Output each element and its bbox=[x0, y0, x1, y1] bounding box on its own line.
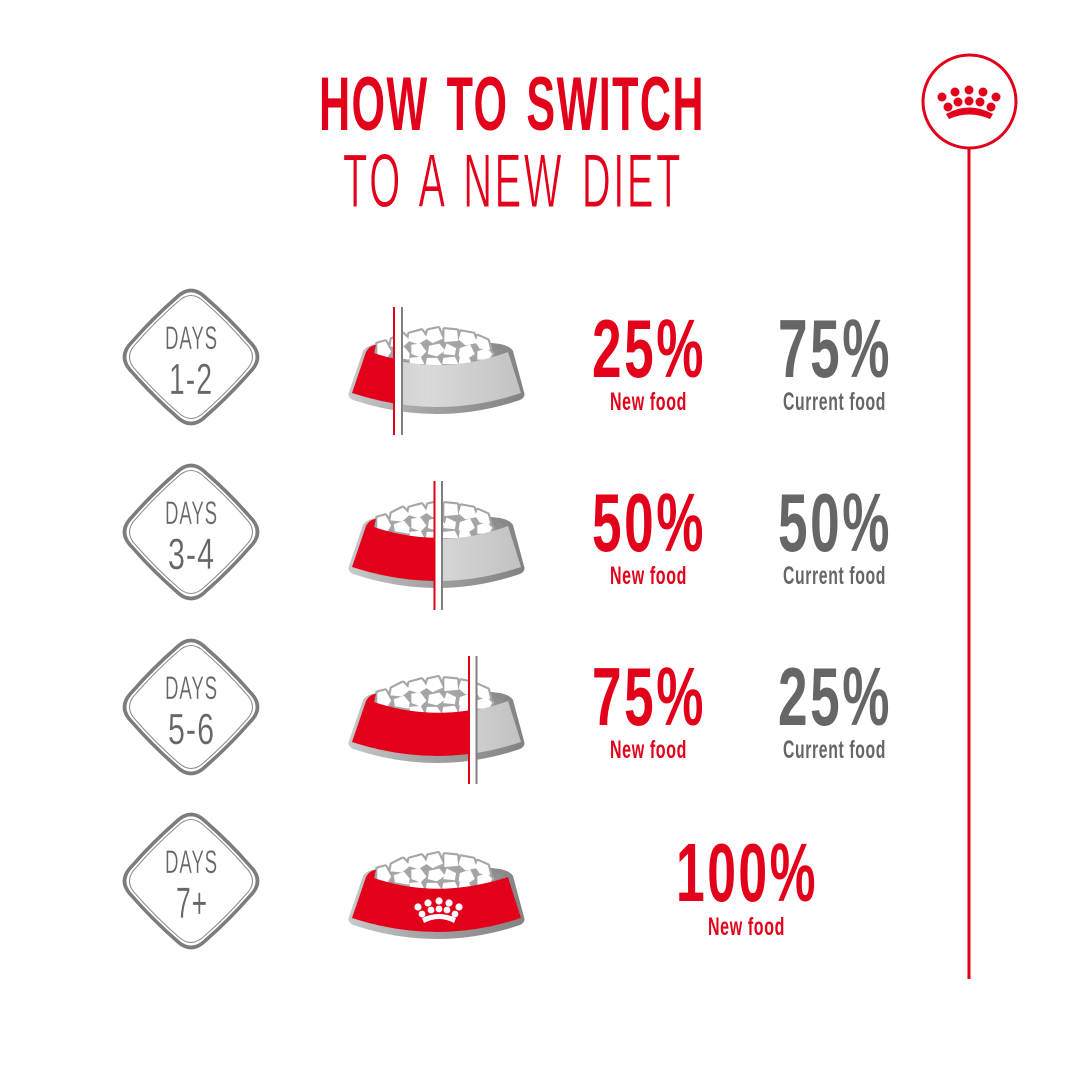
badge: days 3-4: DAYS bbox=[165, 495, 218, 531]
icon: white crown bbox=[414, 897, 463, 923]
stat: 100 percent new food: New food bbox=[708, 913, 785, 941]
stat: 75 percent new food: 75% bbox=[592, 650, 706, 743]
row: days 3-4 bbox=[124, 466, 892, 610]
badge: days 5-6 bbox=[124, 640, 258, 774]
row: days 5-6 bbox=[124, 640, 892, 784]
logo circle with timeline bbox=[923, 55, 1016, 979]
badge: days 7+: DAYS bbox=[165, 844, 218, 880]
icon: crown bbox=[938, 86, 1000, 119]
stat: 100 percent new food bbox=[676, 826, 818, 941]
title line 1: HOW TO SWITCH bbox=[319, 62, 705, 147]
badge: days 5-6: DAYS bbox=[165, 670, 218, 706]
stat: 100 percent new food: 100% bbox=[676, 826, 818, 919]
stat: 25 percent new food bbox=[592, 302, 706, 416]
bowl: 50 percent red bbox=[348, 481, 524, 610]
stat: 25 percent new food: 25% bbox=[592, 302, 706, 395]
stat: 75 percent current food: 75% bbox=[778, 302, 892, 395]
badge: days 5-6: 5-6 bbox=[168, 705, 215, 754]
badge: days 1-2: 1-2 bbox=[169, 355, 213, 404]
bowl: 100 percent red with crown bbox=[348, 854, 524, 939]
stat: 25 percent current food: 25% bbox=[778, 650, 892, 743]
stat: 75 percent current food bbox=[778, 302, 892, 416]
row: days 7+ bbox=[124, 814, 818, 948]
stat: 50 percent new food bbox=[592, 476, 706, 590]
stat: 75 percent new food: New food bbox=[610, 736, 687, 764]
row: days 1-2 bbox=[124, 290, 892, 435]
title bbox=[319, 62, 705, 224]
stat: 75 percent current food: Current food bbox=[783, 388, 886, 416]
bowl: 25 percent red bbox=[348, 307, 524, 435]
badge: days 3-4: 3-4 bbox=[168, 530, 215, 579]
stat: 25 percent current food bbox=[778, 650, 892, 764]
stat: 50 percent current food: Current food bbox=[783, 562, 886, 590]
badge: days 7+ bbox=[124, 814, 258, 948]
badge: days 3-4 bbox=[124, 466, 258, 598]
badge: days 7+: 7+ bbox=[176, 879, 208, 928]
stat: 75 percent new food bbox=[592, 650, 706, 764]
badge: days 1-2 bbox=[124, 290, 258, 424]
title line 2: TO A NEW DIET bbox=[343, 139, 683, 224]
stat: 50 percent new food: 50% bbox=[592, 476, 706, 569]
stat: 25 percent current food: Current food bbox=[783, 736, 886, 764]
bowl: 75 percent red bbox=[348, 656, 524, 784]
stat: 25 percent new food: New food bbox=[610, 388, 687, 416]
badge: days 1-2: DAYS bbox=[165, 320, 218, 356]
stat: 50 percent current food: 50% bbox=[778, 476, 892, 569]
stat: 50 percent current food bbox=[778, 476, 892, 590]
stat: 50 percent new food: New food bbox=[610, 562, 687, 590]
